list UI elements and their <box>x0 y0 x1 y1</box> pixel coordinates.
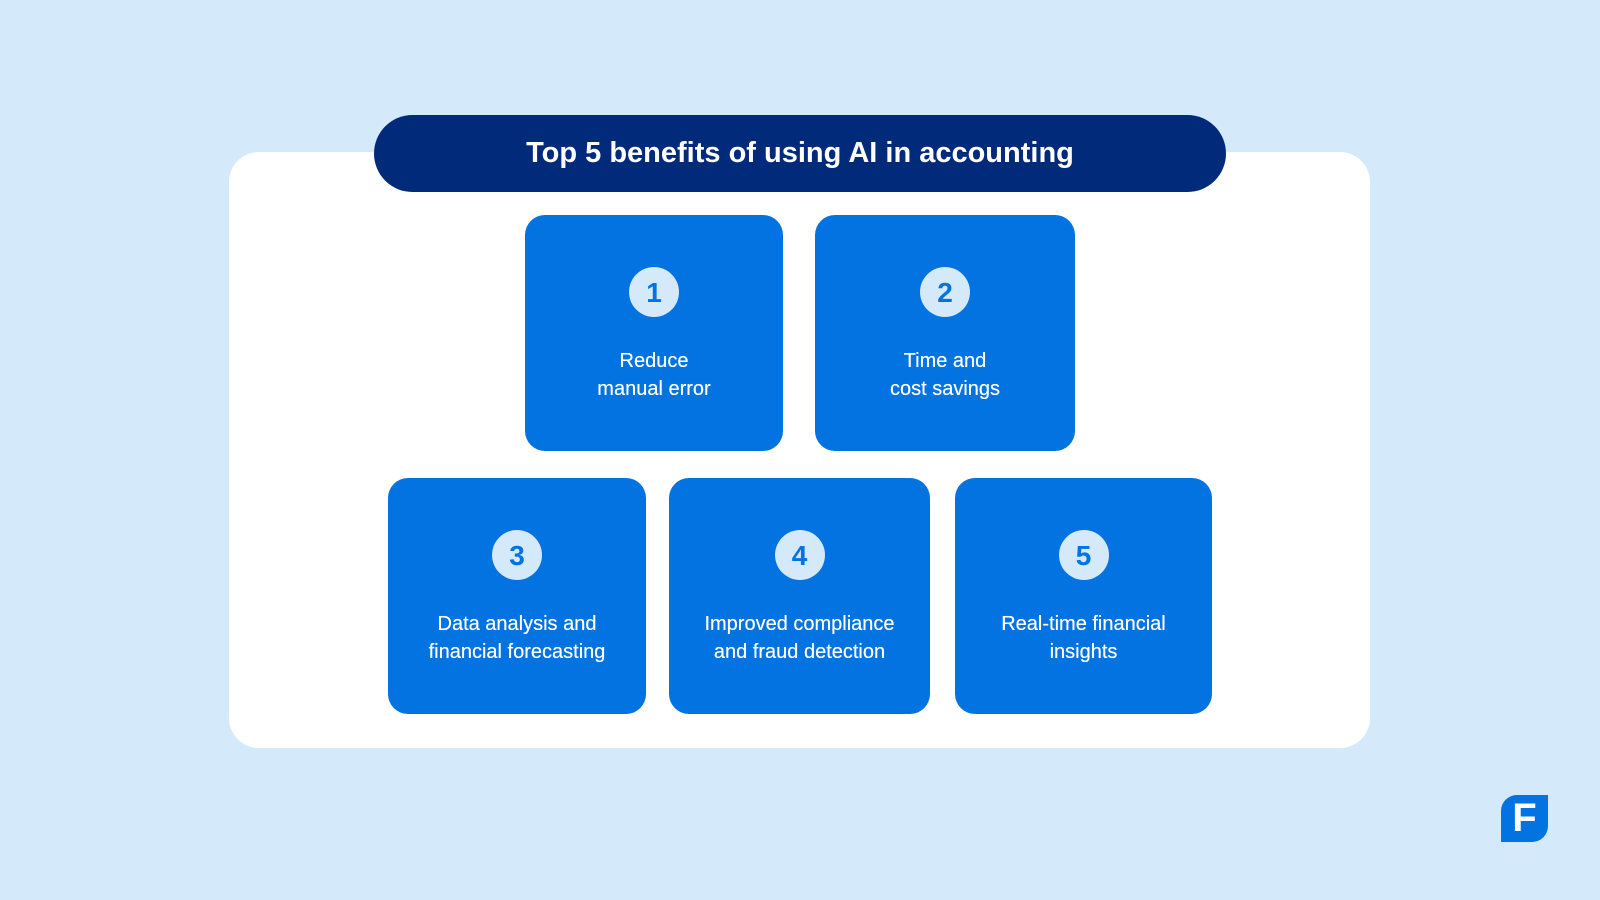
card text 5: Real-time financial <box>1001 613 1166 635</box>
card text 3: Data analysis and <box>438 613 596 635</box>
number badge 5 <box>1058 530 1108 580</box>
number badge 1 <box>629 267 679 317</box>
card 5 <box>955 478 1212 714</box>
card 3 <box>388 478 646 714</box>
card text 3 <box>428 613 605 663</box>
number badge 2 <box>920 267 970 317</box>
card 1 <box>525 215 783 451</box>
icon: logo: F <box>1512 796 1537 840</box>
number badge 1: 1 <box>646 277 662 308</box>
card text 4 <box>704 613 895 663</box>
card text 4: and fraud detection <box>714 641 885 663</box>
card text 2: cost savings <box>890 378 1000 400</box>
title: Top 5 benefits of using AI in accounting <box>526 137 1074 169</box>
card 4 <box>669 478 930 714</box>
number badge 4 <box>774 530 824 580</box>
title <box>374 115 1226 192</box>
card text 5 <box>1001 613 1166 663</box>
number badge 3: 3 <box>509 540 525 571</box>
card text 1: Reduce <box>620 350 688 372</box>
number badge 2: 2 <box>937 277 953 308</box>
card text 2: Time and <box>904 350 986 372</box>
icon: logo <box>1501 795 1548 842</box>
card text 1 <box>597 350 711 400</box>
number badge 5: 5 <box>1076 540 1091 571</box>
panel: white background <box>229 152 1370 748</box>
card text 3: financial forecasting <box>429 641 605 663</box>
card text 1: manual error <box>597 378 711 400</box>
number badge 3 <box>492 530 542 580</box>
card text 2 <box>890 350 1000 400</box>
card text 5: insights <box>1050 641 1117 663</box>
card 2 <box>815 215 1075 451</box>
number badge 4: 4 <box>792 540 807 571</box>
card text 4: Improved compliance <box>704 613 895 635</box>
